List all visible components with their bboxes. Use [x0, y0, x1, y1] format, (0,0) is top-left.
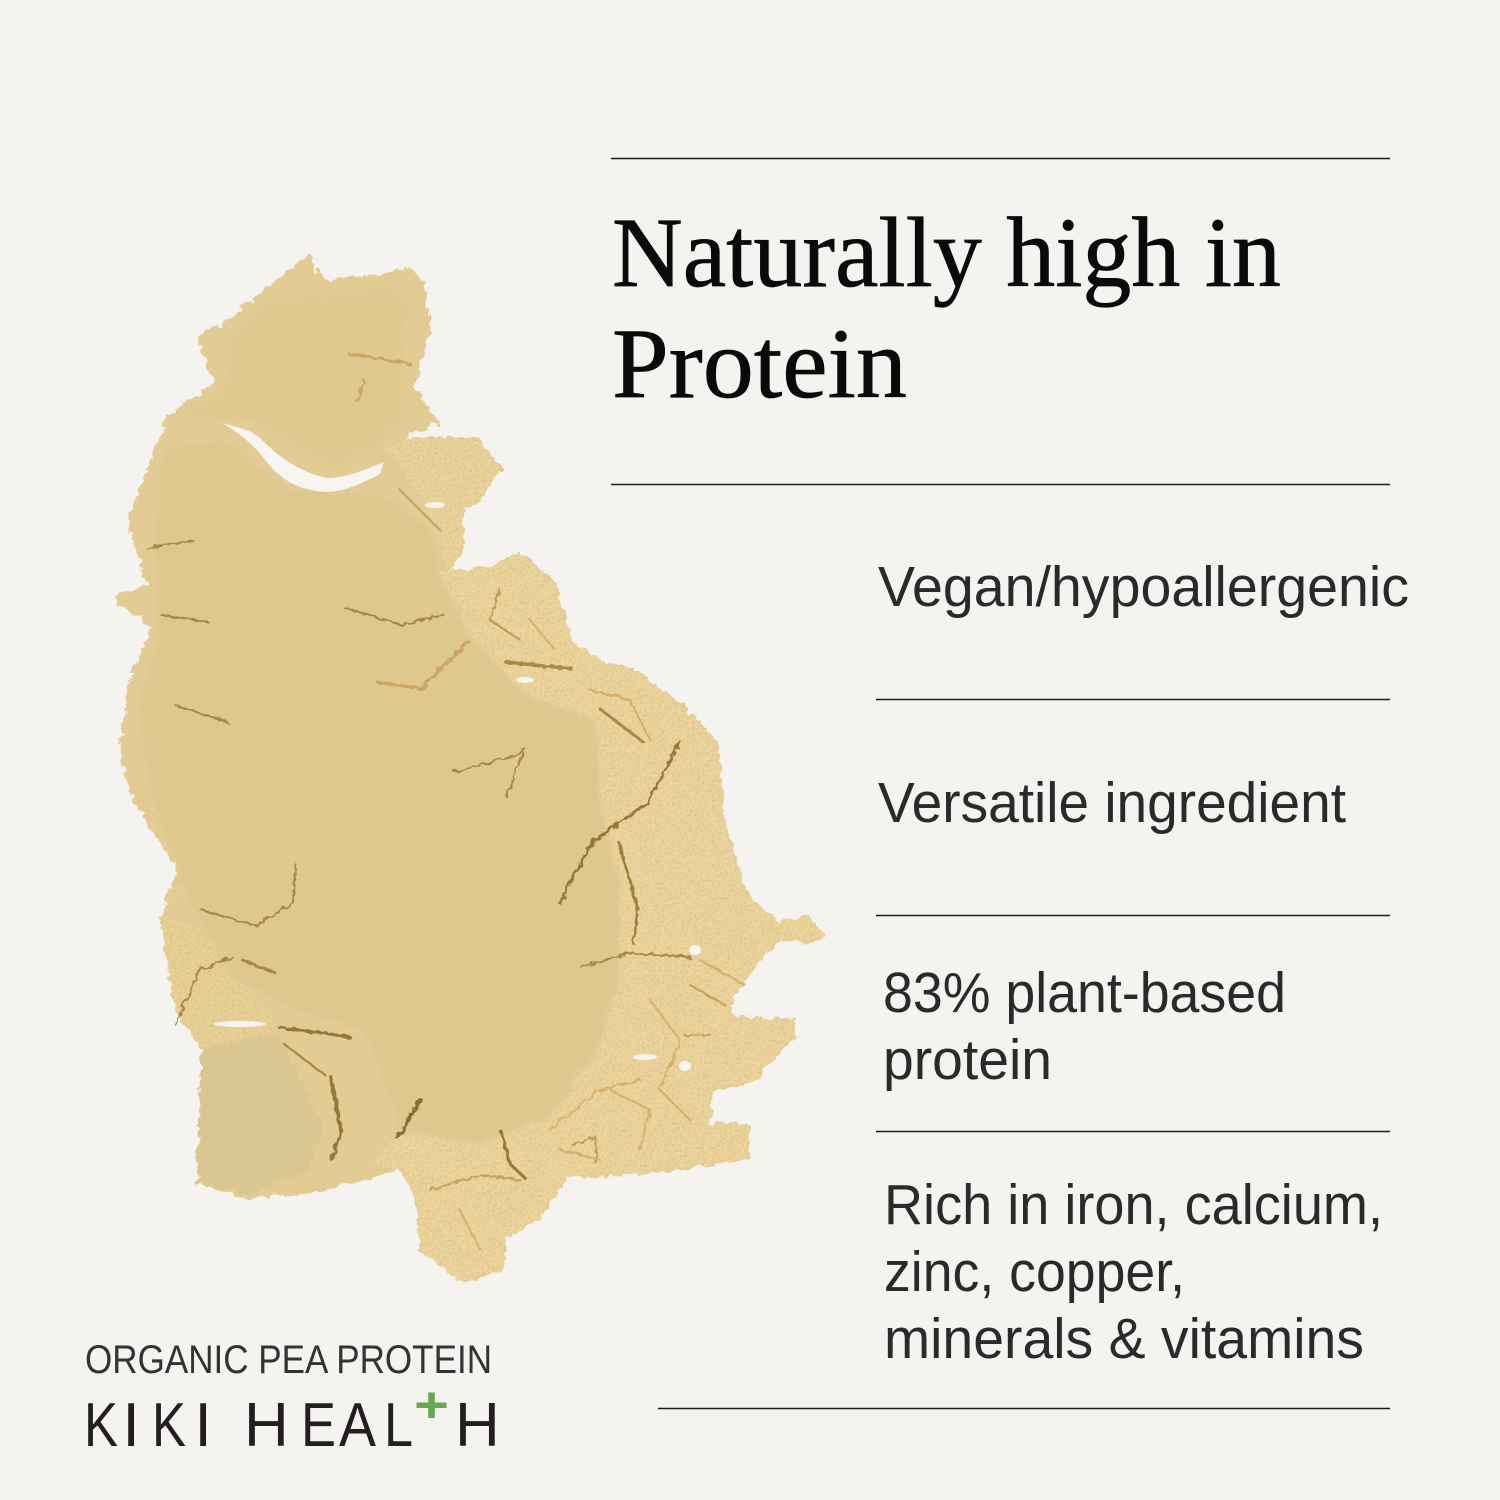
logo: Kiki Health: E	[301, 1391, 336, 1460]
benefit: rich in minerals	[884, 1173, 1383, 1371]
powder base shape	[112, 253, 824, 1282]
lower left wedge	[197, 1034, 322, 1194]
product label: ORGANIC PEA PROTEIN	[85, 1338, 492, 1382]
gap in the powder	[222, 423, 384, 492]
heading: Protein	[612, 308, 907, 419]
left granular edge	[135, 800, 205, 905]
bottom divider	[658, 1408, 1390, 1410]
image: pea protein powder swatch	[112, 253, 824, 1282]
logo: Kiki Health: A	[339, 1391, 377, 1460]
logo: Kiki Health: H	[244, 1391, 289, 1460]
small gaps	[214, 502, 701, 1071]
cracks	[147, 354, 745, 1250]
logo: Kiki Health: K	[152, 1391, 186, 1460]
logo plus sign: +	[414, 1377, 449, 1433]
pale faceted chunk	[624, 745, 742, 943]
logo: Kiki Health: H	[455, 1391, 500, 1460]
logo: Kiki Health: L	[384, 1391, 413, 1460]
logo: Kiki Health	[84, 1377, 500, 1460]
benefit: rich in minerals: zinc, copper,	[884, 1240, 1185, 1304]
loose granular powder edge	[370, 553, 824, 1282]
heading divider	[611, 484, 1390, 486]
benefit: plant-based protein: 83% plant-based	[883, 961, 1286, 1025]
logo: Kiki Health: K	[84, 1391, 118, 1460]
benefit: versatile: Versatile ingredient	[878, 771, 1346, 835]
logo: Kiki Health: I	[122, 1391, 140, 1460]
benefit: rich in minerals: minerals & vitamins	[884, 1307, 1364, 1371]
divider 3	[876, 1130, 1390, 1132]
heading	[612, 197, 1281, 419]
benefit: plant-based protein: protein	[883, 1028, 1052, 1092]
smooth compressed centre	[140, 440, 619, 1144]
upper loose clump	[387, 438, 501, 571]
heading: Naturally high in	[612, 197, 1281, 308]
divider 2	[876, 914, 1390, 916]
smooth upper lobe	[185, 288, 410, 465]
lower left granular edge	[161, 916, 279, 1050]
benefit: plant-based protein	[883, 961, 1286, 1092]
benefit: rich in minerals: Rich in iron, calcium,	[884, 1173, 1383, 1237]
logo: Kiki Health: I	[194, 1391, 212, 1460]
benefit: vegan: Vegan/hypoallergenic	[878, 555, 1409, 619]
top divider	[611, 158, 1390, 160]
divider 1	[876, 698, 1390, 700]
